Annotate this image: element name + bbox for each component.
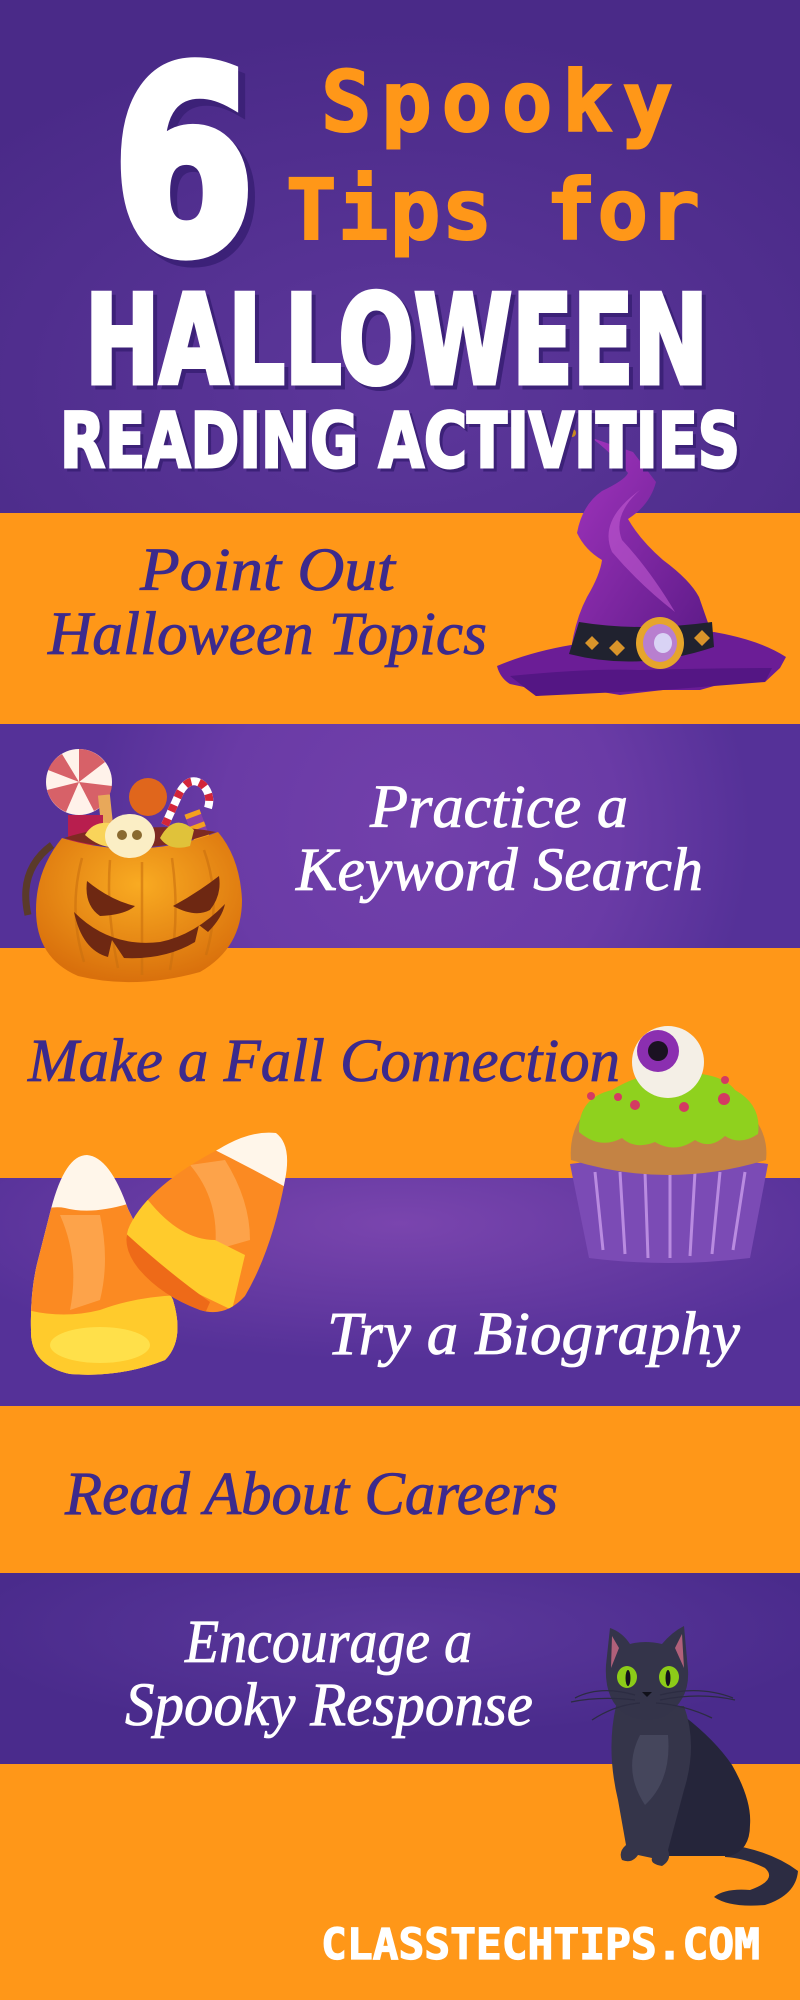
band: tip 5 background	[0, 1406, 800, 1573]
tip 2 text	[295, 774, 703, 904]
tip 1 text: Halloween Topics	[47, 601, 487, 668]
band: tip 1 background	[0, 513, 800, 724]
tip 6 text	[125, 1609, 533, 1739]
tip 1 text	[47, 537, 487, 668]
band: tip 6 background	[0, 1573, 800, 1764]
tip 4 text: Try a Biography	[327, 1301, 741, 1368]
footer website: CLASSTECHTIPS.COM	[321, 1920, 760, 1970]
title: Tips for: Tips for	[286, 161, 700, 259]
title: number 6: 6	[112, 15, 255, 313]
icon: pumpkin candy bucket	[26, 749, 242, 982]
tip 6 text: Spooky Response	[125, 1672, 533, 1739]
icon: witch hat	[497, 427, 786, 696]
band: tip 4 background	[0, 1178, 800, 1406]
tip 5 text: Read About Careers	[64, 1461, 558, 1528]
tip 1 text: Point Out	[139, 537, 397, 604]
band: tip 3 background	[0, 948, 800, 1178]
icon: candy corn pair	[30, 1132, 288, 1375]
tip 2 text: Keyword Search	[295, 837, 703, 904]
title: Spooky: Spooky	[321, 53, 673, 151]
icon: black cat	[571, 1626, 798, 1906]
band: footer background	[0, 1764, 800, 2000]
tip 2 text: Practice a	[369, 774, 628, 841]
band: tip 2 background	[0, 724, 800, 948]
tip 3 text: Make a Fall Connection	[27, 1028, 620, 1095]
icon: eyeball cupcake	[570, 1026, 768, 1263]
tip 6 text: Encourage a	[184, 1609, 472, 1676]
band: header background	[0, 0, 800, 513]
